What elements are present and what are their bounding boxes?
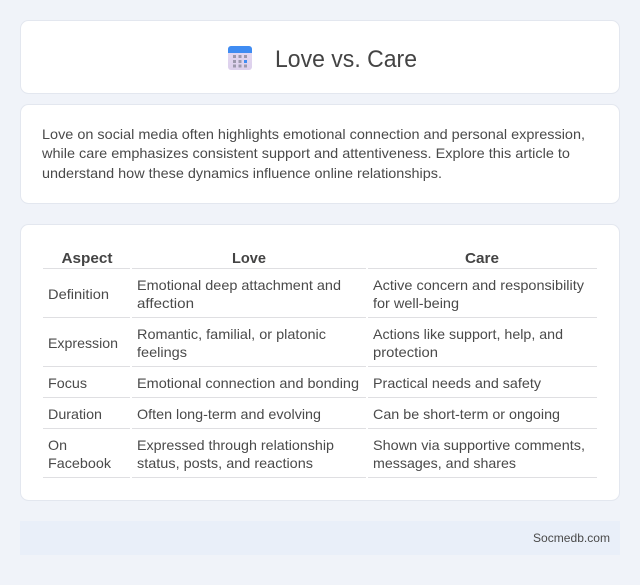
icon: calendar [228,46,252,70]
panel: intro [20,104,620,204]
row: on facebook [48,437,585,471]
row: expression: feelings [137,344,187,360]
row: focus: Focus [48,375,87,391]
intro text: understand how these dynamics influence online relationships. [42,165,442,181]
row: expression: protection [373,344,438,360]
title: Love vs. Care [275,46,417,73]
row: definition: Active concern and responsibility [373,277,584,293]
table header: Care [465,250,499,267]
row: definition [48,277,584,311]
row: on facebook: On [48,437,67,453]
row: on facebook: status, posts, and reactions [137,455,313,471]
row: definition: Emotional deep attachment and [137,277,341,293]
row: duration: Can be short-term or ongoing [373,406,560,422]
row: expression: Actions like support, help, and [373,326,563,342]
row: duration: Often long-term and evolving [137,406,321,422]
row: duration: Duration [48,406,102,422]
row: on facebook: Shown via supportive comments, [373,437,585,453]
row: focus [48,375,541,391]
table header: Love [232,250,266,267]
intro text [41,126,585,181]
table header: Aspect [62,250,112,267]
intro text: while care emphasizes consistent support and attentiveness. Explore this article to [41,145,570,161]
row: focus: Practical needs and safety [373,375,541,391]
table header [62,250,499,267]
intro text: Love on social media often highlights emotional connection and personal expression, [42,126,585,142]
row: expression: Romantic, familial, or platonic [137,326,326,342]
footer [20,521,620,555]
panel: comparison table [20,224,620,500]
row: duration [48,406,560,422]
row: definition: Definition [48,286,109,302]
row: expression [48,326,563,360]
panel: title [20,20,620,94]
row: definition: for well-being [373,295,459,311]
row: on facebook: Facebook [48,455,112,471]
row: focus: Emotional connection and bonding [137,375,359,391]
row: expression: Expression [48,335,118,351]
row: definition: affection [137,295,194,311]
row: on facebook: messages, and shares [373,455,516,471]
row: on facebook: Expressed through relationship [137,437,334,453]
footer: Socmedb.com [533,531,610,545]
